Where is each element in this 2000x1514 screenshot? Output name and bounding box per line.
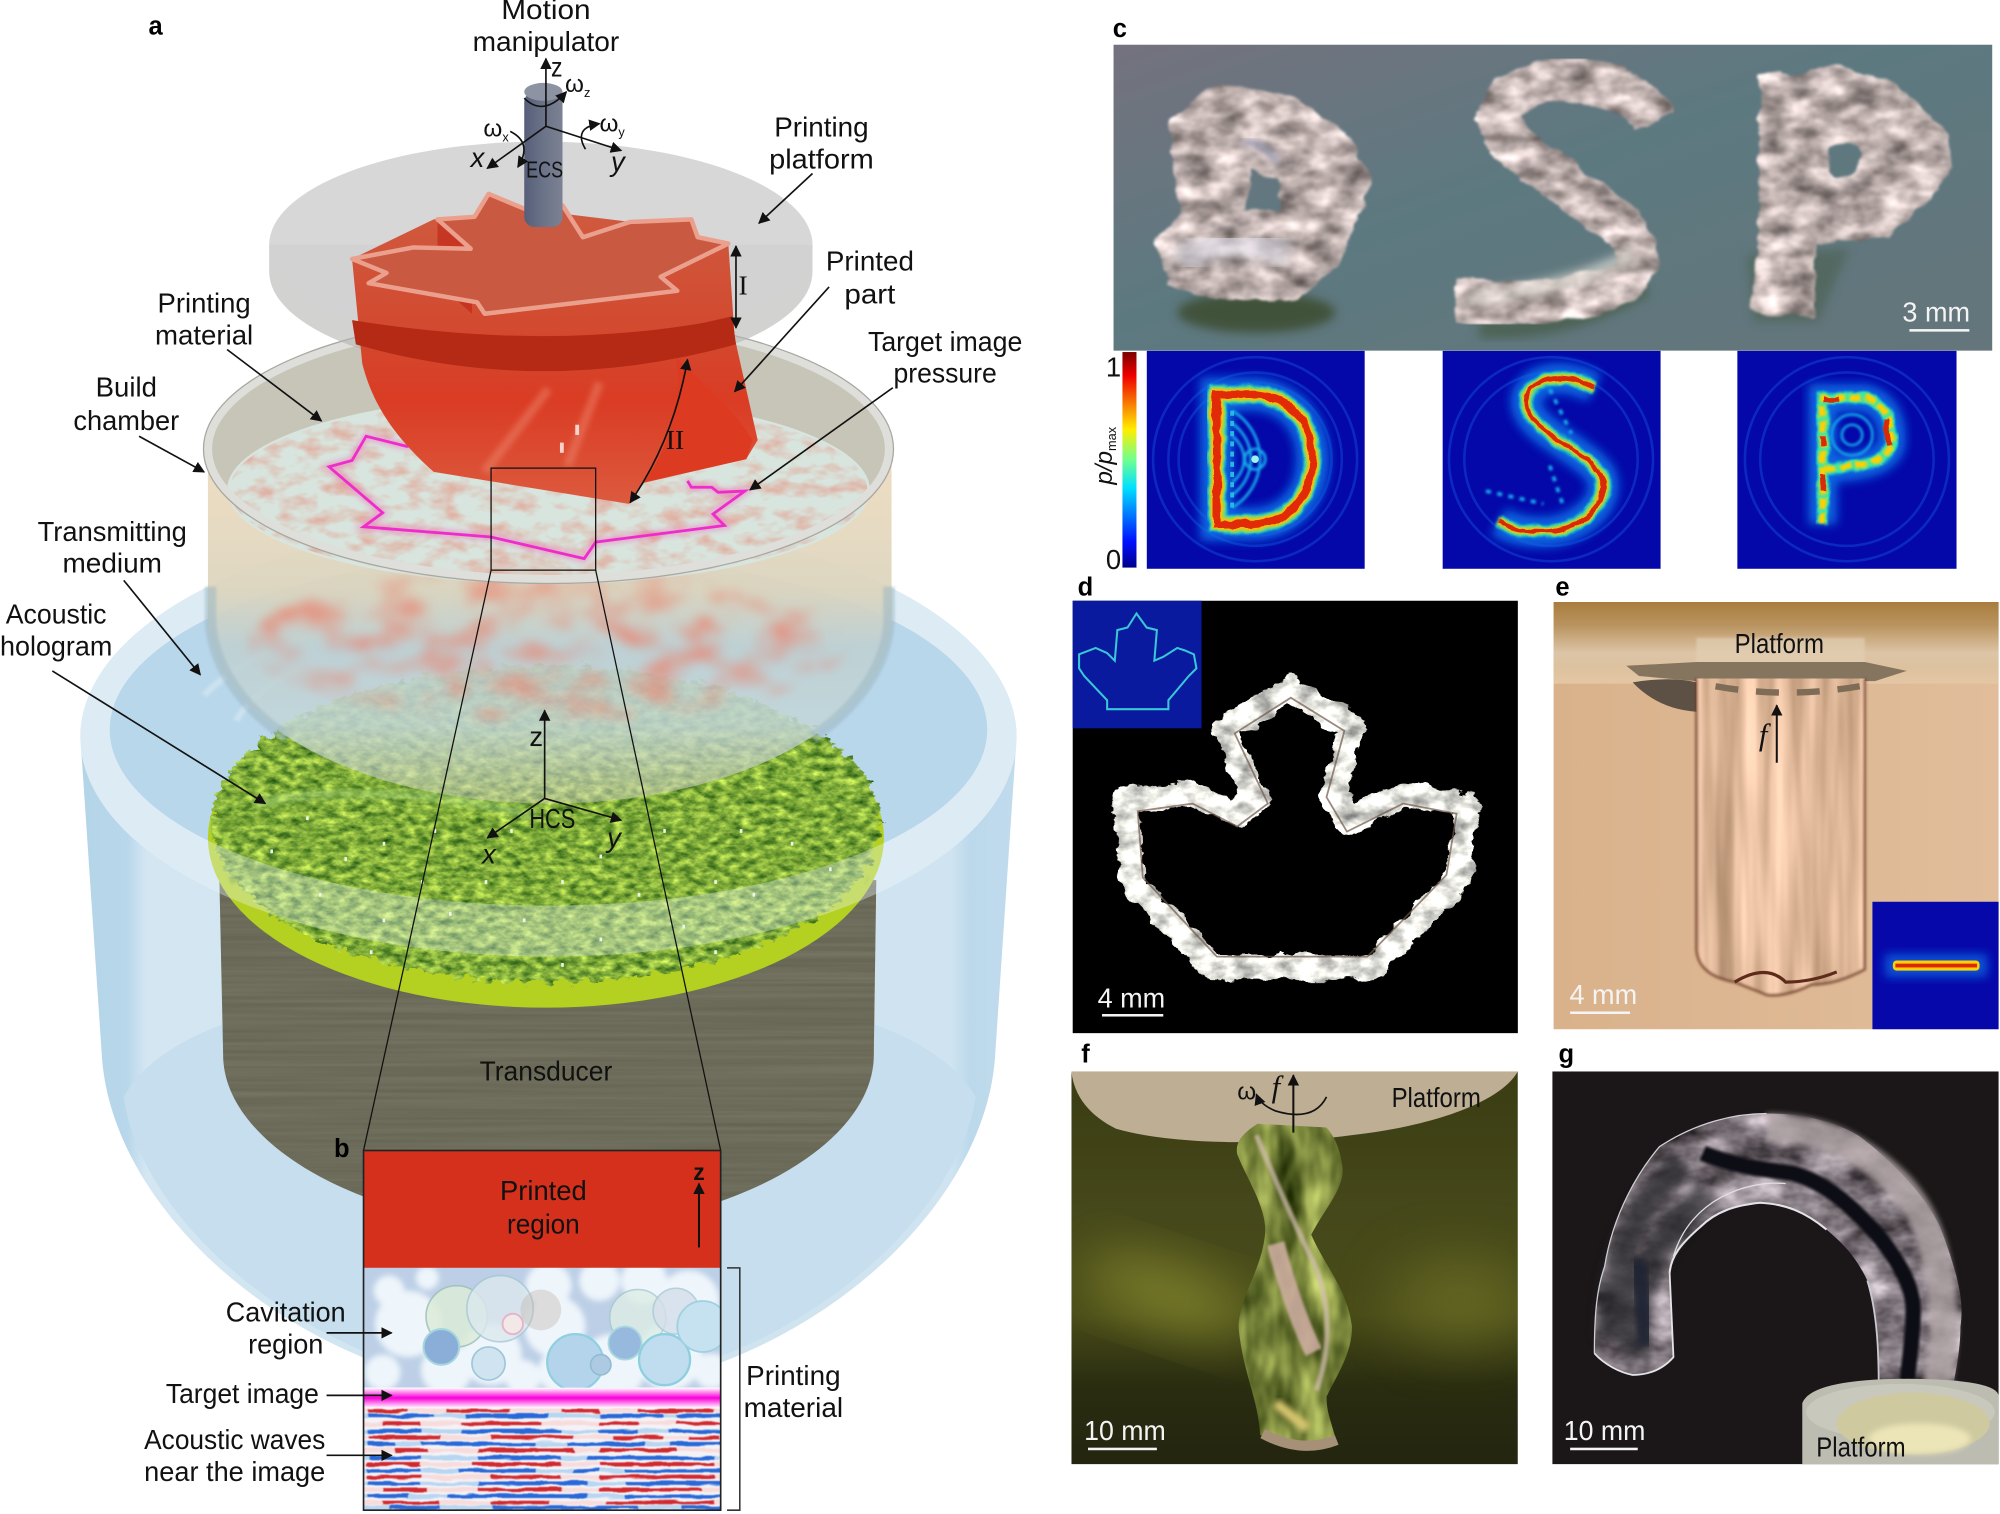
twisted part xyxy=(1237,1124,1352,1447)
printing platform disk xyxy=(269,142,813,375)
panel f: twisted part xyxy=(1071,1040,1531,1464)
printed maple leaf xyxy=(1125,689,1467,967)
label: build chamber xyxy=(73,372,204,472)
acoustic waves xyxy=(364,1408,721,1510)
label: acoustic waves: Acoustic waves xyxy=(144,1424,325,1455)
panel letter d: d xyxy=(1078,574,1093,602)
acoustic hologram xyxy=(208,666,884,1008)
label: printing platform xyxy=(759,111,874,223)
hologram coordinate system: HCS xyxy=(529,803,575,834)
label: target image: Target image xyxy=(166,1378,319,1409)
label: transmitting medium: Transmitting xyxy=(38,516,187,547)
photo of letters xyxy=(1114,45,1992,351)
outer water tank xyxy=(80,518,1017,1397)
cylindrical platform xyxy=(1802,1379,1999,1464)
letter D xyxy=(1156,80,1372,333)
label: target image pressure xyxy=(750,326,1022,490)
label: printing material bracket xyxy=(727,1268,843,1510)
dimension arrows I and II: I xyxy=(739,271,748,301)
label: printed part: part xyxy=(844,279,896,310)
label: acoustic hologram: hologram xyxy=(0,631,112,662)
target image outline xyxy=(329,436,745,559)
scale bar 4 mm: 4 mm xyxy=(1570,979,1637,1010)
label: printing material: Printing xyxy=(158,287,251,318)
printed region: Printed xyxy=(500,1175,587,1206)
panel d: printed maple leaf outline xyxy=(1073,574,1518,1033)
label: printed part: Printed xyxy=(826,245,914,276)
colour bar: max xyxy=(1104,426,1119,451)
scale bar 4 mm: 4 mm xyxy=(1098,983,1165,1014)
label: acoustic hologram: Acoustic xyxy=(6,599,107,630)
end effector coordinate system: ω xyxy=(565,71,584,98)
end effector coordinate system: y xyxy=(609,146,627,177)
panel letter f: f xyxy=(1081,1040,1090,1068)
end effector coordinate system: ω xyxy=(599,110,618,137)
label: platform: Platform xyxy=(1392,1082,1481,1113)
label: printing material xyxy=(155,287,321,421)
dimension arrows I and II: II xyxy=(666,425,684,455)
printed column xyxy=(1696,679,1865,995)
heat map P xyxy=(1737,351,1957,569)
hologram coordinate system xyxy=(480,710,623,870)
force arrow f: f xyxy=(1759,718,1772,752)
panel b: zoomed region xyxy=(144,1135,843,1510)
scale bar 3 mm: 3 mm xyxy=(1902,296,1970,327)
printed part: maple leaf xyxy=(352,194,758,504)
label: printing platform: platform xyxy=(769,143,874,174)
label: platform: Platform xyxy=(1735,628,1824,659)
label: printed part xyxy=(735,245,914,392)
end effector coordinate system: y xyxy=(618,124,625,139)
motion arrows omega and f: f xyxy=(1272,1070,1285,1104)
motion arrows omega and f xyxy=(1237,1070,1327,1133)
transducer: Transducer xyxy=(480,1055,612,1086)
build chamber xyxy=(203,314,893,804)
panel letter e: e xyxy=(1555,574,1570,602)
label: motion manipulator: manipulator xyxy=(473,26,619,57)
colour bar: p/p xyxy=(1091,451,1118,485)
motion shaft xyxy=(524,83,563,227)
panel a: 3D printer schematic xyxy=(0,0,1022,1397)
printed region xyxy=(364,1150,721,1268)
transparent arch xyxy=(1594,1113,1962,1403)
transducer xyxy=(219,880,876,1231)
inset line pressure map xyxy=(1872,902,1999,1029)
panel letter g: g xyxy=(1559,1040,1574,1068)
panel e: straight printed column xyxy=(1554,574,1999,1029)
hologram coordinate system: y xyxy=(605,822,623,853)
printed region: region xyxy=(507,1208,580,1239)
label: platform: Platform xyxy=(1816,1432,1906,1463)
colour bar: 1 xyxy=(1106,351,1121,382)
label: build chamber: Build xyxy=(96,372,157,403)
end effector coordinate system: ω xyxy=(483,115,502,142)
label: transmitting medium xyxy=(38,516,200,675)
label: printing material bracket: Printing xyxy=(746,1360,841,1391)
label: printing material: material xyxy=(155,319,253,350)
hologram coordinate system: z xyxy=(529,721,543,752)
force arrow f xyxy=(1759,705,1777,763)
end effector coordinate system xyxy=(469,52,627,182)
panel b border xyxy=(364,1150,721,1510)
label: cavitation region xyxy=(226,1296,392,1359)
platform disk xyxy=(1071,1071,1518,1142)
letter S xyxy=(1457,81,1654,330)
end effector coordinate system: ECS xyxy=(526,156,563,182)
scale bar 10 mm: 10 mm xyxy=(1564,1415,1645,1446)
end effector coordinate system: z xyxy=(551,52,563,83)
colour bar xyxy=(1091,351,1136,575)
label: printing material bracket: material xyxy=(744,1392,843,1423)
end effector coordinate system: z xyxy=(584,85,590,100)
label: transmitting medium: medium xyxy=(63,548,162,579)
label: cavitation region: Cavitation xyxy=(226,1296,346,1327)
water surface front rim xyxy=(80,518,1017,957)
panel g: printed arch xyxy=(1552,1040,1999,1464)
panel letter c: c xyxy=(1113,15,1127,43)
cavitation bubbles xyxy=(364,1268,720,1388)
end effector coordinate system: x xyxy=(502,130,509,145)
label: acoustic hologram xyxy=(0,599,265,804)
panel letter b: b xyxy=(334,1135,350,1163)
end effector coordinate system: x xyxy=(469,142,486,173)
label: cavitation region: region xyxy=(248,1328,323,1359)
motion arrows omega and f: ω xyxy=(1237,1078,1256,1105)
label: target image pressure: Target image xyxy=(868,326,1022,357)
heat map D xyxy=(1147,351,1365,569)
label: printing platform: Printing xyxy=(774,111,869,142)
letter P xyxy=(1747,66,1952,321)
heat map S xyxy=(1443,351,1661,569)
label: build chamber: chamber xyxy=(73,405,179,436)
label: acoustic waves xyxy=(144,1424,392,1487)
label: target image pressure: pressure xyxy=(893,358,997,389)
colour bar: 0 xyxy=(1106,544,1121,575)
inset target maple leaf xyxy=(1073,601,1202,728)
panel letter a: a xyxy=(149,12,164,40)
label: motion manipulator xyxy=(473,0,619,57)
label: acoustic waves: near the image xyxy=(144,1456,325,1487)
printed region: z xyxy=(693,1159,705,1185)
panel c: DSP printed letters xyxy=(1091,15,1992,575)
scale bar 10 mm: 10 mm xyxy=(1084,1415,1166,1446)
dimension arrows I and II xyxy=(630,246,748,503)
target image band xyxy=(364,1388,721,1408)
hologram coordinate system: x xyxy=(480,839,497,870)
zoom box and projection lines xyxy=(364,468,721,1150)
